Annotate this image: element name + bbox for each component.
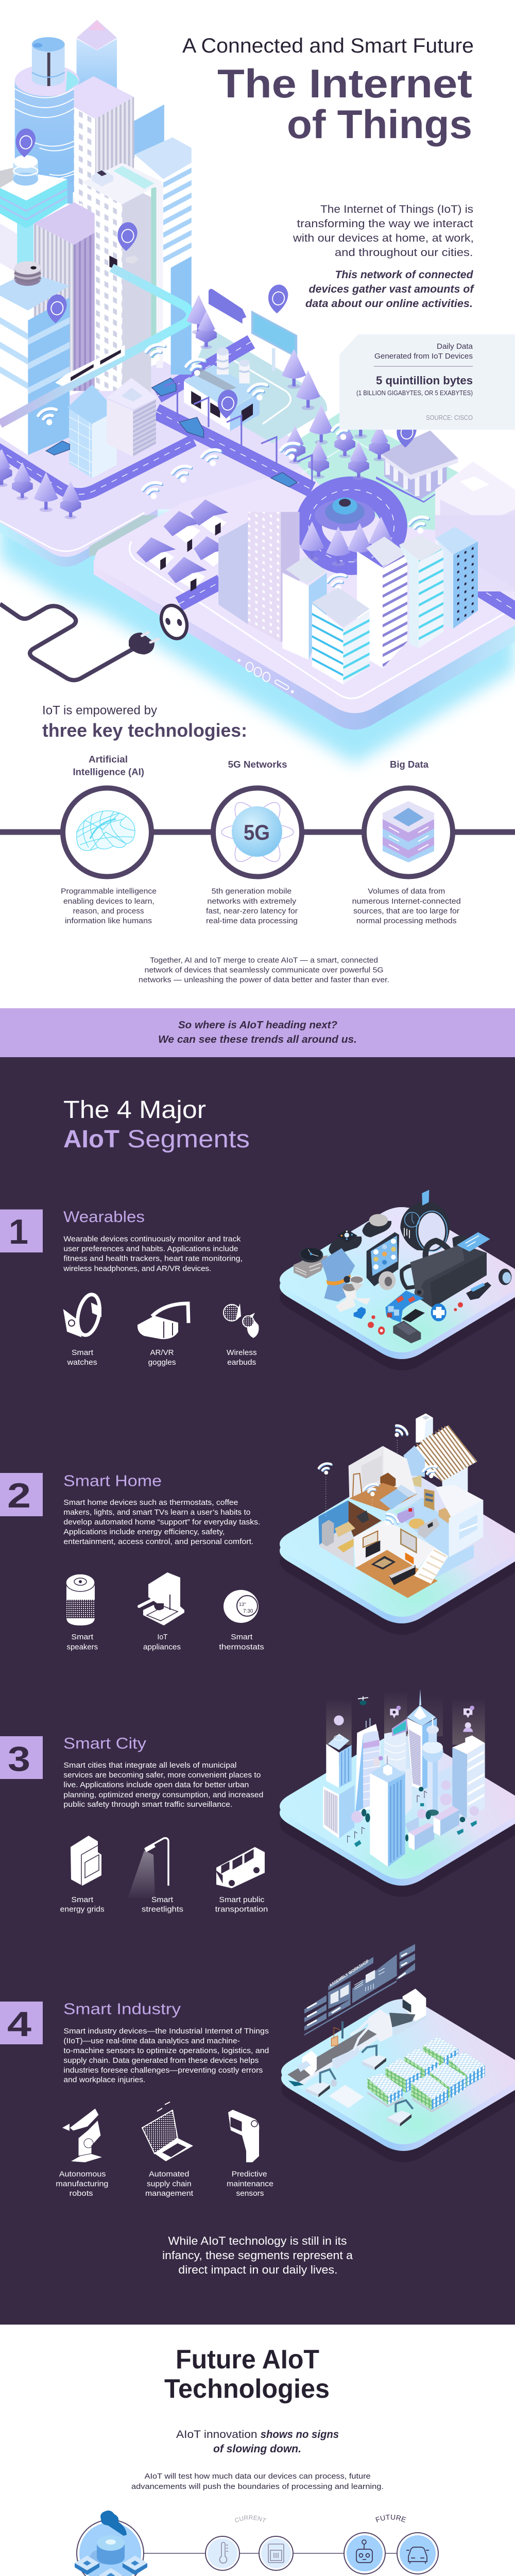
- far machines: [368, 1989, 426, 2042]
- device: pulse oximeter: [393, 1320, 421, 1343]
- intro text: transforming the way we interact: [297, 218, 473, 230]
- text: future intro: shows no signs: [261, 2429, 339, 2441]
- segment 4: smart industry: [0, 2000, 273, 2198]
- label: future: FUTURE: [375, 2514, 406, 2522]
- icon labels: supply chain: [147, 2180, 192, 2189]
- building: left cyan podium: [0, 155, 73, 273]
- device: smart panel: [367, 1232, 399, 1290]
- segment 3: smart city: Smart cities that integrate all levels of municipal: [63, 1761, 236, 1770]
- pitched roof: [403, 1426, 477, 1481]
- icon labels: [60, 1895, 268, 1913]
- icon labels: IoT: [158, 1633, 168, 1641]
- panel: daily data stat: (1 BILLION GIGABYTES, OR 5 EXABYTES): [356, 389, 473, 397]
- text: segments closing statement: While AIoT technology is still in its: [168, 2234, 347, 2247]
- icon labels: Autonomous: [59, 2170, 106, 2178]
- platform: left district: [0, 362, 329, 567]
- label: current: CURRENT: [235, 2515, 267, 2522]
- platform illustration: smart industry: [281, 1944, 515, 2162]
- intro text: devices gather vast amounts of: [309, 283, 475, 295]
- tower: cylinders: [15, 37, 79, 192]
- panel: daily data stat: 5 quintillion bytes: [376, 374, 473, 387]
- icon labels: [67, 1633, 264, 1652]
- device: cuff band: [400, 1190, 450, 1251]
- icon: energy meter: [71, 1836, 101, 1886]
- icon: smart thermostat: [224, 1590, 259, 1623]
- intro text: and throughout our cities.: [335, 247, 473, 259]
- platform: mint district: [282, 411, 515, 539]
- icon labels: Automated: [149, 2170, 189, 2178]
- device: flexible display: [385, 1291, 425, 1323]
- connector line: [0, 829, 515, 835]
- icon: smart watch: [64, 1293, 103, 1337]
- icon labels: thermostats: [219, 1642, 264, 1652]
- panel: daily data stat: SOURCE: CISCO: [426, 414, 473, 421]
- circles: current applications: [205, 2536, 293, 2570]
- helipad tower: [323, 1734, 354, 1838]
- building: white with lavender roof: [74, 76, 134, 204]
- segment 4: smart industry: to-machine sensors to optimize operations, logistics, and: [63, 2046, 269, 2055]
- segment 2: smart home: Smart home devices such as thermostats, coffee: [63, 1498, 238, 1507]
- spire tower: [407, 1689, 437, 1789]
- heading: three key technologies: three key technologies:: [42, 720, 247, 741]
- segment 2: smart home: entertainment, access control, and personal comfort.: [63, 1537, 253, 1546]
- TV tower: [422, 1717, 443, 1816]
- robots: [305, 2046, 413, 2126]
- segment 2: smart home: [0, 1472, 264, 1652]
- icon labels: management: [145, 2189, 194, 2198]
- conveyor belt: [287, 2021, 377, 2086]
- segment 2: smart home: makers, lights, and smart TVs learn a user’s habits to: [63, 1508, 250, 1517]
- device: fitness band and ring: [466, 1268, 511, 1300]
- technology: artificial intelligence: enabling devices to learn,: [63, 897, 154, 906]
- upper room floor and bed: [349, 1483, 417, 1511]
- main title line 2: of Things: [287, 101, 472, 147]
- text: AIoT definition: [139, 956, 389, 984]
- icon labels: Smart: [151, 1895, 174, 1904]
- tower D: [282, 573, 308, 660]
- number box: 1: [9, 1212, 28, 1251]
- text: segments closing statement: [162, 2234, 353, 2276]
- elevated rail: [0, 268, 191, 424]
- text: AIoT definition: networks — unleashing the power of data better and faster than ever.: [139, 976, 389, 984]
- tower: tall centre: [82, 163, 163, 394]
- heading: future AIoT technologies: [164, 2345, 330, 2404]
- building: grey-lavender front: [107, 378, 158, 456]
- text: segments closing statement: infancy, these segments represent a: [162, 2249, 353, 2262]
- heading: 4 major segments: [63, 1096, 250, 1153]
- furniture: right room: [397, 1489, 461, 1538]
- text: future intro: AIoT innovation: [176, 2429, 258, 2441]
- segment 1: wearables: Wearables: [63, 1208, 145, 1226]
- title block: [182, 35, 474, 147]
- heading: future AIoT technologies: Future AIoT: [176, 2345, 319, 2375]
- chimney: [416, 1413, 433, 1443]
- icon labels: manufacturing: [56, 2180, 108, 2189]
- lower blue wall: [434, 1545, 474, 1578]
- device: dial band: [362, 1214, 391, 1238]
- block: grey lavender: [218, 522, 248, 624]
- building: blue-white tiered block: [0, 261, 70, 455]
- platform illustration: smart city: [280, 1689, 515, 1897]
- technology: 5G networks: networks with extremely: [207, 897, 297, 906]
- device: metal watch: [294, 1247, 328, 1279]
- number box: [0, 1210, 43, 1252]
- heading: 4 major segments: Segments: [127, 1126, 250, 1153]
- technology: big data: [352, 759, 461, 925]
- number box: [0, 2002, 43, 2044]
- banner: where is AIoT heading: We can see these trends all around us.: [158, 1034, 357, 1045]
- illustration: isometric smart city: [0, 20, 515, 764]
- tower: pyramid top: [77, 20, 117, 98]
- icon: smart speaker: [66, 1574, 95, 1625]
- number box: 4: [7, 2005, 31, 2044]
- building: lavender roof tower: [34, 202, 95, 391]
- power cord and plug: [0, 604, 158, 680]
- upper right floor: [397, 1498, 449, 1557]
- icon labels: Predictive: [232, 2170, 267, 2178]
- security camera: [126, 256, 139, 264]
- number box: [0, 1473, 43, 1516]
- front tower: [370, 1756, 405, 1867]
- heading: 4 major segments: The 4 Major: [63, 1096, 206, 1124]
- text: future intro: of slowing down.: [213, 2443, 301, 2455]
- icon: public bus: [215, 1847, 265, 1888]
- cars: [46, 378, 297, 487]
- building: stripe tower right: [134, 138, 192, 375]
- segment 4: smart industry: (IIoT)—use real-time data analytics and machine-: [63, 2037, 240, 2045]
- tower E: [312, 604, 343, 684]
- icon: laptop: [142, 2102, 193, 2161]
- wifi signals: [38, 345, 428, 591]
- icon labels: speakers: [67, 1642, 98, 1652]
- building: bottom right: [435, 462, 515, 591]
- roundabout dome: [315, 498, 375, 531]
- technology: big data: sources, that are too large for: [353, 907, 459, 916]
- intro text: data about our online activities.: [305, 298, 473, 310]
- segment 4: smart industry: and workplace injuries.: [63, 2075, 145, 2084]
- banner: where is AIoT heading: So where is AIoT heading next?: [178, 1020, 337, 1031]
- right block: [437, 1735, 485, 1819]
- icon labels: appliances: [143, 1642, 181, 1652]
- lower towers: [218, 512, 515, 684]
- text: AIoT definition: network of devices that seamlessly communicate over powerful 5G: [145, 965, 384, 975]
- icon labels: [67, 1348, 257, 1367]
- segment 4: smart industry: Smart industry devices—the Industrial Internet of Things: [63, 2027, 269, 2036]
- icon: smart thermostat: 7:30: [243, 1608, 253, 1614]
- glow under the platforms: [0, 513, 515, 764]
- intro text: with our devices at home, at work,: [293, 232, 474, 244]
- icon labels: energy grids: [60, 1905, 105, 1913]
- icon: streetlight: [128, 1838, 168, 1898]
- building: glass front: [67, 384, 116, 478]
- heading: future AIoT technologies: Technologies: [164, 2374, 330, 2404]
- white pad: [329, 2085, 364, 2108]
- front right wall: [435, 1485, 483, 1557]
- device: square smartwatch: [329, 1229, 362, 1257]
- block behind front tower: [405, 1769, 412, 1815]
- segment 1: wearables: user preferences and habits. Applications include: [63, 1245, 238, 1253]
- segment 3: smart city: [0, 1734, 268, 1913]
- icon labels: streetlights: [142, 1905, 183, 1913]
- platform: main phone-shaped district: [94, 460, 515, 730]
- trees: [0, 295, 393, 566]
- segment 1: wearables: fitness and health trackers, heart rate monitoring,: [63, 1255, 243, 1263]
- chat bubbles and pins: [334, 1706, 479, 1823]
- technology: artificial intelligence: Intelligence (AI): [73, 767, 144, 777]
- circles: future applications: [344, 2533, 438, 2574]
- icons: plus and hearts: [354, 1302, 463, 1335]
- speech panel: [209, 289, 246, 324]
- platform illustration: wearables: [280, 1190, 515, 1370]
- building: behind centre: [134, 97, 164, 121]
- tower G: [399, 545, 419, 648]
- technology: big data: numerous Internet-connected: [352, 897, 461, 906]
- text: segments closing statement: direct impact in our daily lives.: [178, 2263, 338, 2276]
- technology: 5G networks: 5th generation mobile: [212, 887, 291, 896]
- technology: 5G networks: 5G Networks: [228, 759, 287, 770]
- panel: dark segments background: [0, 1057, 515, 2325]
- technology: artificial intelligence: Programmable intelligence: [61, 887, 157, 896]
- panel: daily data stat: Generated from IoT Devices: [374, 352, 473, 361]
- heading: three key technologies: IoT is empowered by: [42, 704, 157, 717]
- text: AIoT definition: Together, AI and IoT merge to create AIoT — a smart, connected: [150, 956, 378, 965]
- segment 4: smart industry: Smart Industry: [63, 2000, 181, 2018]
- panel: daily data stat: Daily Data: [437, 343, 473, 351]
- technology: 5G networks: fast, near-zero latency for: [206, 907, 298, 916]
- segment 1: wearables: wireless headphones, and AR/VR devices.: [63, 1264, 211, 1273]
- icon labels: Smart: [231, 1633, 253, 1641]
- staircase: [414, 1547, 448, 1584]
- technology: 5G networks: [206, 759, 302, 925]
- right house wall: [442, 1467, 468, 1499]
- number box: [0, 1736, 43, 1779]
- panel: daily data stat: [339, 334, 515, 430]
- low blocks: [405, 1806, 459, 1851]
- icon labels: Wireless: [227, 1348, 257, 1357]
- holographic dashboard: ASSEMBLY WORKSHOP: [329, 1958, 370, 1988]
- icon labels: sensors: [236, 2189, 264, 2198]
- segment 3: smart city: services are becoming safer, more convenient places to: [63, 1771, 261, 1780]
- platform: teal district: [184, 329, 327, 444]
- segment 2: smart home: Applications include energy efficiency, safety,: [63, 1528, 225, 1536]
- icon labels: robots: [70, 2189, 93, 2198]
- living room: [354, 1520, 438, 1598]
- intro text: The Internet of Things (IoT) is: [320, 204, 473, 215]
- text: future intro: [131, 2429, 384, 2491]
- segment 3: smart city: planning, optimized energy consumption, and increased: [63, 1791, 263, 1799]
- heading: three key technologies: [42, 704, 247, 741]
- icon labels: Smart: [71, 1895, 94, 1904]
- segment 3: smart city: public safety through smart traffic surveillance.: [63, 1800, 232, 1809]
- wearable: smart shirt: [321, 1248, 355, 1302]
- icon labels: goggles: [148, 1358, 176, 1367]
- location pins: [16, 128, 417, 448]
- icon: coffee machine: [139, 1572, 184, 1625]
- main title line 1: The Internet: [217, 61, 472, 106]
- curved tower: [355, 1718, 380, 1812]
- technology: artificial intelligence: information like humans: [65, 917, 152, 925]
- glow columns: [326, 1691, 485, 1745]
- icon labels: Smart: [72, 1348, 94, 1357]
- billboard tower: [384, 1718, 407, 1771]
- technology: artificial intelligence: Artificial: [89, 754, 128, 765]
- holographic dashboard: [304, 1944, 415, 2036]
- technology: artificial intelligence: reason, and process: [73, 907, 144, 916]
- icon: wireframe brain: [76, 811, 135, 851]
- icon labels: Smart: [71, 1633, 94, 1641]
- segment 2: smart home: Smart Home: [63, 1472, 162, 1490]
- device: VR headset: [402, 1232, 490, 1308]
- icon labels: transportation: [215, 1905, 268, 1913]
- icon: 5G globe: [221, 796, 294, 868]
- tower F: [357, 551, 383, 668]
- intro text: [293, 204, 475, 310]
- upper room walls: [349, 1446, 416, 1498]
- segment 3: smart city: Smart City: [63, 1734, 147, 1752]
- kicker: A Connected and Smart Future: [182, 35, 474, 57]
- trees, lamps and vehicles: [348, 1787, 477, 1847]
- block: pink grid: [248, 512, 281, 642]
- icon: 5G globe: 5G: [244, 820, 270, 844]
- segment 4: smart industry: industries foresee challenges—preventing costly errors: [63, 2066, 263, 2075]
- kitchen: [318, 1500, 382, 1567]
- bank: [376, 430, 460, 503]
- technology: big data: normal processing methods: [356, 917, 456, 925]
- icon: AR/VR goggles: [138, 1303, 188, 1338]
- icon: wireless earbuds: [224, 1303, 259, 1338]
- icon labels: earbuds: [227, 1358, 256, 1367]
- text: future intro: AIoT will test how much data our devices can process, future: [145, 2472, 371, 2481]
- bathroom: [403, 1446, 425, 1477]
- icon: smart thermostat: 13°: [239, 1602, 246, 1607]
- power outlet: [157, 602, 192, 642]
- segment 1: wearables: [0, 1208, 259, 1367]
- technology: artificial intelligence: [61, 754, 157, 925]
- number box: 2: [7, 1476, 31, 1515]
- icon: maintenance sensor: [228, 2110, 259, 2162]
- segment 4: smart industry: supply chain. Data generated from these devices helps: [63, 2056, 259, 2065]
- icon labels: Smart public: [219, 1895, 265, 1904]
- icon labels: AR/VR: [150, 1348, 174, 1357]
- factory: [184, 348, 260, 431]
- platform illustration: smart home: [280, 1413, 515, 1635]
- billboard: [251, 311, 297, 371]
- train: [55, 345, 125, 386]
- heading: 4 major segments: AIoT: [63, 1126, 119, 1153]
- segment 3: smart city: live. Applications include open data for better urban: [63, 1781, 249, 1789]
- icon labels: [56, 2170, 273, 2198]
- icon: server stack: [383, 801, 434, 862]
- number box: 3: [8, 1739, 30, 1778]
- technology: 5G networks: real-time data processing: [206, 917, 298, 925]
- roads: [0, 342, 515, 613]
- tower H: [435, 538, 453, 629]
- icon labels: maintenance: [227, 2180, 273, 2189]
- illustration: edge computing: [75, 2511, 147, 2576]
- houses: [136, 499, 228, 591]
- wearable: smart socks: [336, 1276, 371, 1312]
- technology: big data: Volumes of data from: [368, 887, 445, 896]
- block: lavender back right: [435, 515, 515, 588]
- pallet stacks: [367, 2037, 485, 2111]
- technology: big data: Big Data: [390, 759, 429, 770]
- intro text: This network of connected: [335, 269, 474, 281]
- text: future intro: advancements will push the boundaries of processing and learning.: [131, 2482, 384, 2491]
- banner: where is AIoT heading: [0, 1008, 515, 1057]
- segment 1: wearables: Wearable devices continuously monitor and track: [63, 1234, 241, 1243]
- segment 2: smart home: develop automated home “support” for everyday tasks.: [63, 1518, 260, 1527]
- wifi signals: [319, 1422, 437, 1530]
- street lamps: [164, 381, 312, 486]
- icon labels: watches: [67, 1358, 97, 1367]
- icon: robot arm: [62, 2108, 102, 2162]
- drone: [358, 1697, 368, 1705]
- row: edge computing: [75, 2510, 439, 2576]
